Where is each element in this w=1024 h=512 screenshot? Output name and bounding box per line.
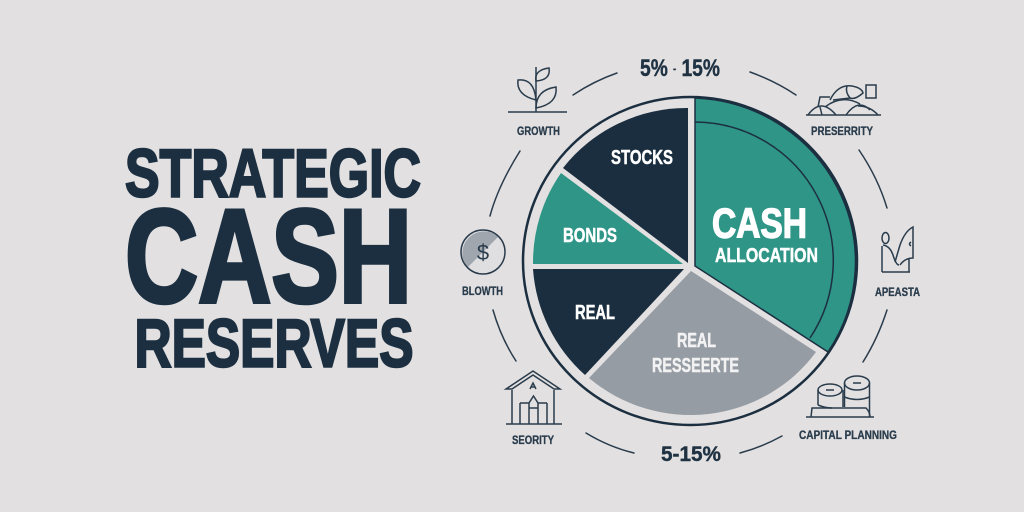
label: blowth: BLOWTH xyxy=(462,284,503,298)
outer ring arcs xyxy=(490,72,887,453)
percentage: top: 15% xyxy=(676,55,720,82)
label: real reserve: REAL xyxy=(677,330,716,352)
label: real: REAL xyxy=(575,302,615,324)
label: growth: GROWTH xyxy=(517,124,560,138)
label: cash: CASH xyxy=(712,200,807,246)
wedge: real reserve xyxy=(589,271,816,415)
icon: growth plant xyxy=(508,67,567,112)
icon: apeasta figure xyxy=(882,227,913,272)
pie outline xyxy=(523,97,857,425)
label: real reserve xyxy=(652,330,739,377)
label: apeasta: APEASTA xyxy=(875,285,920,299)
inner ring line xyxy=(695,122,833,338)
label: allocation: ALLOCATION xyxy=(715,245,818,267)
wedge: bonds xyxy=(533,173,683,264)
icon: dollar coin xyxy=(461,230,505,274)
wedge: real xyxy=(533,269,684,375)
icon: capital planning coins xyxy=(806,376,874,417)
label: preserrity: PRESERRITY xyxy=(811,124,873,138)
icon: dollar coin: $ xyxy=(477,240,489,265)
wedge: cash allocation xyxy=(695,98,855,352)
icon: preserrity landscape xyxy=(806,85,881,115)
label: capital planning: CAPITAL PLANNING xyxy=(799,428,897,442)
icon: security house xyxy=(506,371,562,424)
label: stocks: STOCKS xyxy=(611,147,673,169)
title line: cash: CASH xyxy=(125,183,412,331)
label: seority: SEORITY xyxy=(512,433,554,447)
label: bonds: BONDS xyxy=(563,225,617,247)
label: real reserve: RESSEERTE xyxy=(652,355,739,377)
title line: reserves: RESERVES xyxy=(134,306,414,382)
pie chart xyxy=(523,97,857,425)
percentage: bottom: 5-15% xyxy=(661,443,721,466)
wedge: stocks xyxy=(563,108,688,263)
percentage: top: 5% xyxy=(640,55,675,82)
title xyxy=(125,136,421,382)
percentage: top: - xyxy=(673,63,676,75)
title line: strategic: STRATEGIC xyxy=(125,136,421,212)
